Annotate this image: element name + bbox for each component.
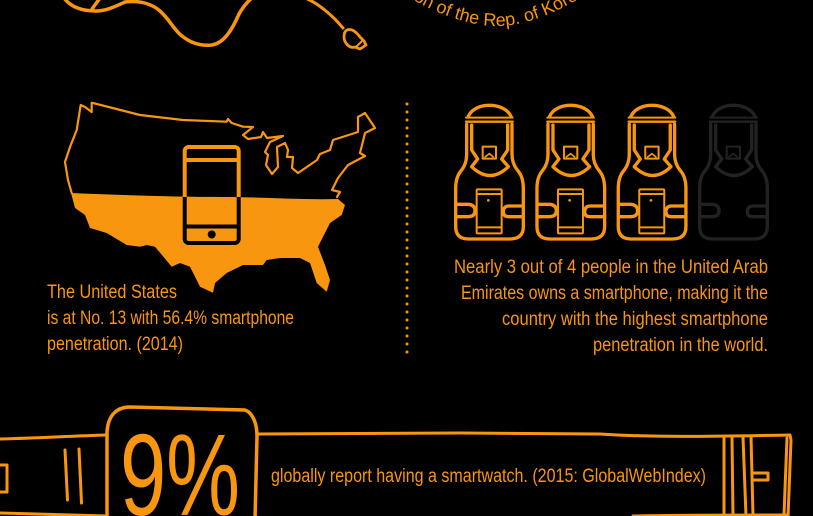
text: UAE caption: Nearly 3 out of 4 people in the United Arab — [454, 257, 768, 278]
text: smartwatch stat caption: globally report having a smartwatch. (2015: GlobalWebIndex) — [271, 466, 706, 487]
text: UAE caption: penetration in the world. — [593, 335, 768, 356]
icon: smartphone on map — [184, 147, 240, 243]
text: United States caption — [47, 282, 294, 355]
map outline: unfilled north — [65, 103, 375, 197]
map: United States smartphone penetration — [65, 103, 375, 293]
text: United States caption: penetration. (2014) — [47, 334, 183, 355]
map fill: filled south — [71, 193, 345, 293]
text: UAE caption: country with the highest smartphone — [502, 309, 768, 330]
text: United States caption: is at No. 13 with 56.4% smartphone — [47, 308, 294, 329]
icon: smartwatch — [0, 407, 791, 516]
text: United States caption: The United States — [47, 282, 177, 303]
watch right strap — [257, 433, 791, 516]
person 3 — [618, 105, 686, 239]
dotted divider — [406, 104, 408, 360]
person 4: greyed out — [700, 105, 767, 239]
watch left strap — [0, 435, 107, 516]
person 1 — [456, 105, 523, 239]
pictogram: 3 of 4 people with smartphones — [456, 105, 767, 239]
icon: charging cable — [64, 0, 366, 49]
person 2 — [537, 105, 605, 239]
text: UAE caption — [454, 257, 768, 356]
watch face — [107, 407, 257, 516]
